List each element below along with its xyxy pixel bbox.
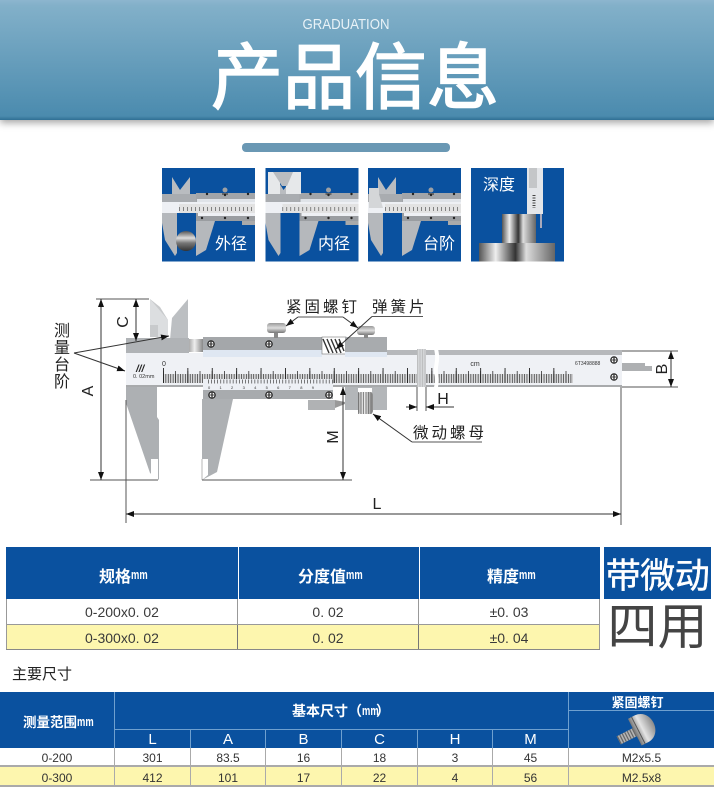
panel: outer diameter: 外径 xyxy=(215,235,247,253)
beam details: 0 xyxy=(162,361,166,368)
row 0-300 xyxy=(6,625,600,650)
lower jaws xyxy=(126,387,233,480)
row 0-200: 45 xyxy=(524,751,537,765)
row 0-200: 0-200 xyxy=(42,751,72,765)
beam details: /// xyxy=(135,364,146,375)
row 0-200: 0. 02 xyxy=(312,604,344,620)
panel: inner diameter: 内径 xyxy=(318,235,350,253)
row 0-200: ±0. 03 xyxy=(490,604,528,620)
lock screw header: 紧固螺钉 xyxy=(611,694,664,710)
row 0-200: 18 xyxy=(373,751,386,765)
row 0-200: 16 xyxy=(297,751,310,765)
row 0-300: 412 xyxy=(142,770,163,784)
row 0-300: 56 xyxy=(524,770,537,784)
row 0-200 xyxy=(0,748,714,767)
letter row: C xyxy=(374,730,385,748)
header row: mm xyxy=(346,567,363,582)
lower slider: 0123456789 xyxy=(208,385,323,390)
basic dimensions header: mm xyxy=(362,703,379,718)
dimension B xyxy=(622,351,678,387)
upper slider xyxy=(203,337,387,357)
header row: 精度 xyxy=(487,568,519,586)
header row: 规格 xyxy=(99,568,131,586)
icon panels: measuring modes xyxy=(162,168,564,262)
panel: step: 台阶 xyxy=(423,235,455,253)
divider pill xyxy=(242,143,450,152)
panel: inner diameter xyxy=(266,168,358,262)
row 0-200: 3 xyxy=(452,751,458,765)
header banner xyxy=(0,0,714,120)
section heading: 主要尺寸 xyxy=(12,666,72,683)
upper jaws xyxy=(150,299,188,351)
basic dimensions header xyxy=(115,692,567,729)
row 0-300: ±0. 04 xyxy=(490,630,528,646)
beam details: 6T3498888 xyxy=(575,361,601,367)
caliper body xyxy=(126,299,652,480)
title: 产品信息 xyxy=(211,18,499,124)
dimension B: B xyxy=(654,364,671,374)
label: lock screw xyxy=(286,298,360,328)
row 0-200: 83.5 xyxy=(216,751,240,765)
label: spring plate xyxy=(336,298,428,349)
header row: 分度值 xyxy=(298,568,346,586)
badge: with fine adjust: 带微动 xyxy=(606,556,709,596)
row 0-300: M2.5x8 xyxy=(622,770,661,784)
row 0-200: 301 xyxy=(142,751,163,765)
row 0-200: 0-200x0. 02 xyxy=(85,604,159,620)
letter row xyxy=(114,729,568,748)
badge: four uses: 四用 xyxy=(608,599,708,655)
lower slider xyxy=(203,379,333,399)
letter row: L xyxy=(148,730,157,748)
row 0-300: 0-300 xyxy=(42,770,72,784)
dimension L xyxy=(126,387,621,525)
label: fine adjust nut: 微动螺母 xyxy=(413,424,487,442)
dimension L: L xyxy=(373,496,382,513)
fine adjust block and nut xyxy=(308,387,387,414)
lock screw header xyxy=(568,692,714,711)
basic dimensions header: 基本尺寸（ ） xyxy=(292,702,390,718)
icon: lock screw xyxy=(616,714,656,746)
measuring range header: mm xyxy=(77,714,94,728)
letter row: A xyxy=(223,730,233,748)
row 0-300 xyxy=(0,767,714,787)
beam details: cm xyxy=(470,361,480,368)
dimensions table xyxy=(0,692,714,787)
label: lock screw: 紧固螺钉 xyxy=(286,298,360,316)
dimension A xyxy=(80,299,158,480)
row 0-300: 0. 02 xyxy=(312,630,344,646)
label: measuring step: 阶 xyxy=(54,373,70,391)
main beam xyxy=(126,338,622,387)
spec table xyxy=(6,547,600,650)
label: measuring step: 台 xyxy=(54,356,70,374)
panel: step xyxy=(368,168,461,262)
letter row: B xyxy=(298,730,308,748)
beam details xyxy=(133,349,652,387)
dimension H xyxy=(406,387,454,411)
lock screws xyxy=(267,323,375,338)
header row xyxy=(6,547,600,599)
label: measuring step: 测 xyxy=(54,322,70,340)
subtitle: GRADUATION xyxy=(302,16,390,32)
label: spring plate: 弹簧片 xyxy=(372,298,428,316)
caliper diagram xyxy=(54,298,678,525)
letter row: H xyxy=(450,730,460,748)
measuring range header: 测量范围 xyxy=(23,715,77,730)
measuring range header xyxy=(0,694,114,748)
row 0-300: 101 xyxy=(218,770,238,784)
row 0-300: 4 xyxy=(452,770,458,784)
divider xyxy=(114,692,115,748)
panel: depth xyxy=(471,168,564,262)
dimension H: H xyxy=(437,391,449,408)
header row: mm xyxy=(519,567,536,582)
label: fine adjust nut xyxy=(373,414,487,442)
row 0-300: 0-300x0. 02 xyxy=(85,630,159,646)
panel: depth: 深度 xyxy=(483,176,515,194)
table header xyxy=(0,692,714,748)
dimension C: C xyxy=(115,316,132,328)
row 0-200: M2x5.5 xyxy=(622,751,661,765)
panel: outer diameter xyxy=(162,168,255,262)
label: measuring step: 量 xyxy=(54,340,70,357)
dimension M: M xyxy=(325,430,342,444)
row 0-300: 17 xyxy=(297,770,310,784)
beam details: 0. 02mm xyxy=(133,374,155,380)
letter row: M xyxy=(524,730,537,748)
dimension A: A xyxy=(80,385,97,396)
row 0-300: 22 xyxy=(373,770,386,784)
dimension C xyxy=(115,299,136,341)
row 0-200 xyxy=(6,599,600,625)
label: measuring step xyxy=(54,322,169,391)
header row: mm xyxy=(131,567,148,582)
